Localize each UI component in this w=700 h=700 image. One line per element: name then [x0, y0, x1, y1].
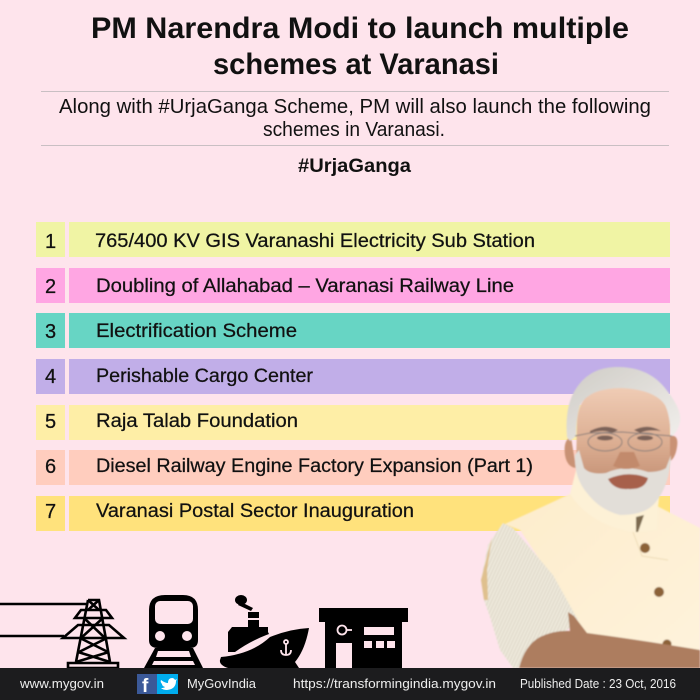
row 4: 4	[45, 366, 56, 388]
jacket	[505, 494, 700, 668]
row 6: 6	[45, 456, 56, 478]
row 6: Diesel Railway Engine Factory Expansion (Part 1)	[96, 456, 533, 477]
hashtag: #UrjaGanga	[298, 156, 411, 177]
scheme list	[36, 222, 670, 531]
row 2: Doubling of Allahabad – Varanasi Railway Line	[96, 276, 514, 297]
footer text: https://transformingindia.mygov.in	[293, 676, 496, 691]
sleeve	[481, 523, 578, 668]
row 1: 765/400 KV GIS Varanashi Electricity Sub Station	[95, 231, 535, 252]
subtitle: schemes in Varanasi.	[263, 119, 445, 141]
title: schemes at Varanasi	[213, 48, 499, 81]
icon: facebook	[137, 674, 157, 697]
footer text: Published Date : 23 Oct, 2016	[520, 676, 676, 691]
footer text	[19, 676, 676, 691]
title	[91, 12, 629, 81]
collar	[570, 470, 660, 532]
portrait: Narendra Modi	[481, 367, 700, 668]
row 5: Raja Talab Foundation	[96, 411, 298, 432]
ears	[565, 436, 677, 468]
row 2	[36, 268, 670, 303]
row 7: 7	[45, 501, 56, 523]
icon: transmission tower	[0, 600, 124, 668]
row 1	[36, 222, 670, 257]
row 6	[36, 450, 670, 485]
row 4: Perishable Cargo Center	[96, 366, 314, 387]
row 5	[36, 405, 670, 440]
footer text: www.mygov.in	[19, 676, 104, 691]
forearm	[519, 612, 700, 668]
row 4	[36, 359, 670, 394]
glasses and eyes	[575, 432, 672, 451]
row 7	[36, 496, 670, 531]
row 7: Varanasi Postal Sector Inauguration	[96, 501, 414, 522]
hair	[567, 367, 680, 441]
row 3: Electrification Scheme	[96, 321, 297, 342]
subtitle: Along with #UrjaGanga Scheme, PM will also launch the following	[59, 96, 651, 118]
row 3	[36, 313, 670, 348]
row 5: 5	[45, 411, 56, 433]
icon: twitter	[157, 674, 178, 694]
title: PM Narendra Modi to launch multiple	[91, 12, 629, 45]
row 1: 1	[45, 231, 56, 253]
row 3: 3	[45, 321, 56, 343]
footer text: MyGovIndia	[187, 676, 257, 691]
icon: post office building	[319, 608, 408, 668]
footer bar	[0, 668, 700, 700]
icon: facebook: f	[142, 676, 149, 697]
row 2: 2	[45, 276, 56, 298]
icon: train	[144, 595, 203, 668]
face	[576, 385, 670, 500]
subtitle	[59, 96, 651, 141]
beard	[575, 450, 671, 515]
icon: ship	[220, 595, 309, 668]
